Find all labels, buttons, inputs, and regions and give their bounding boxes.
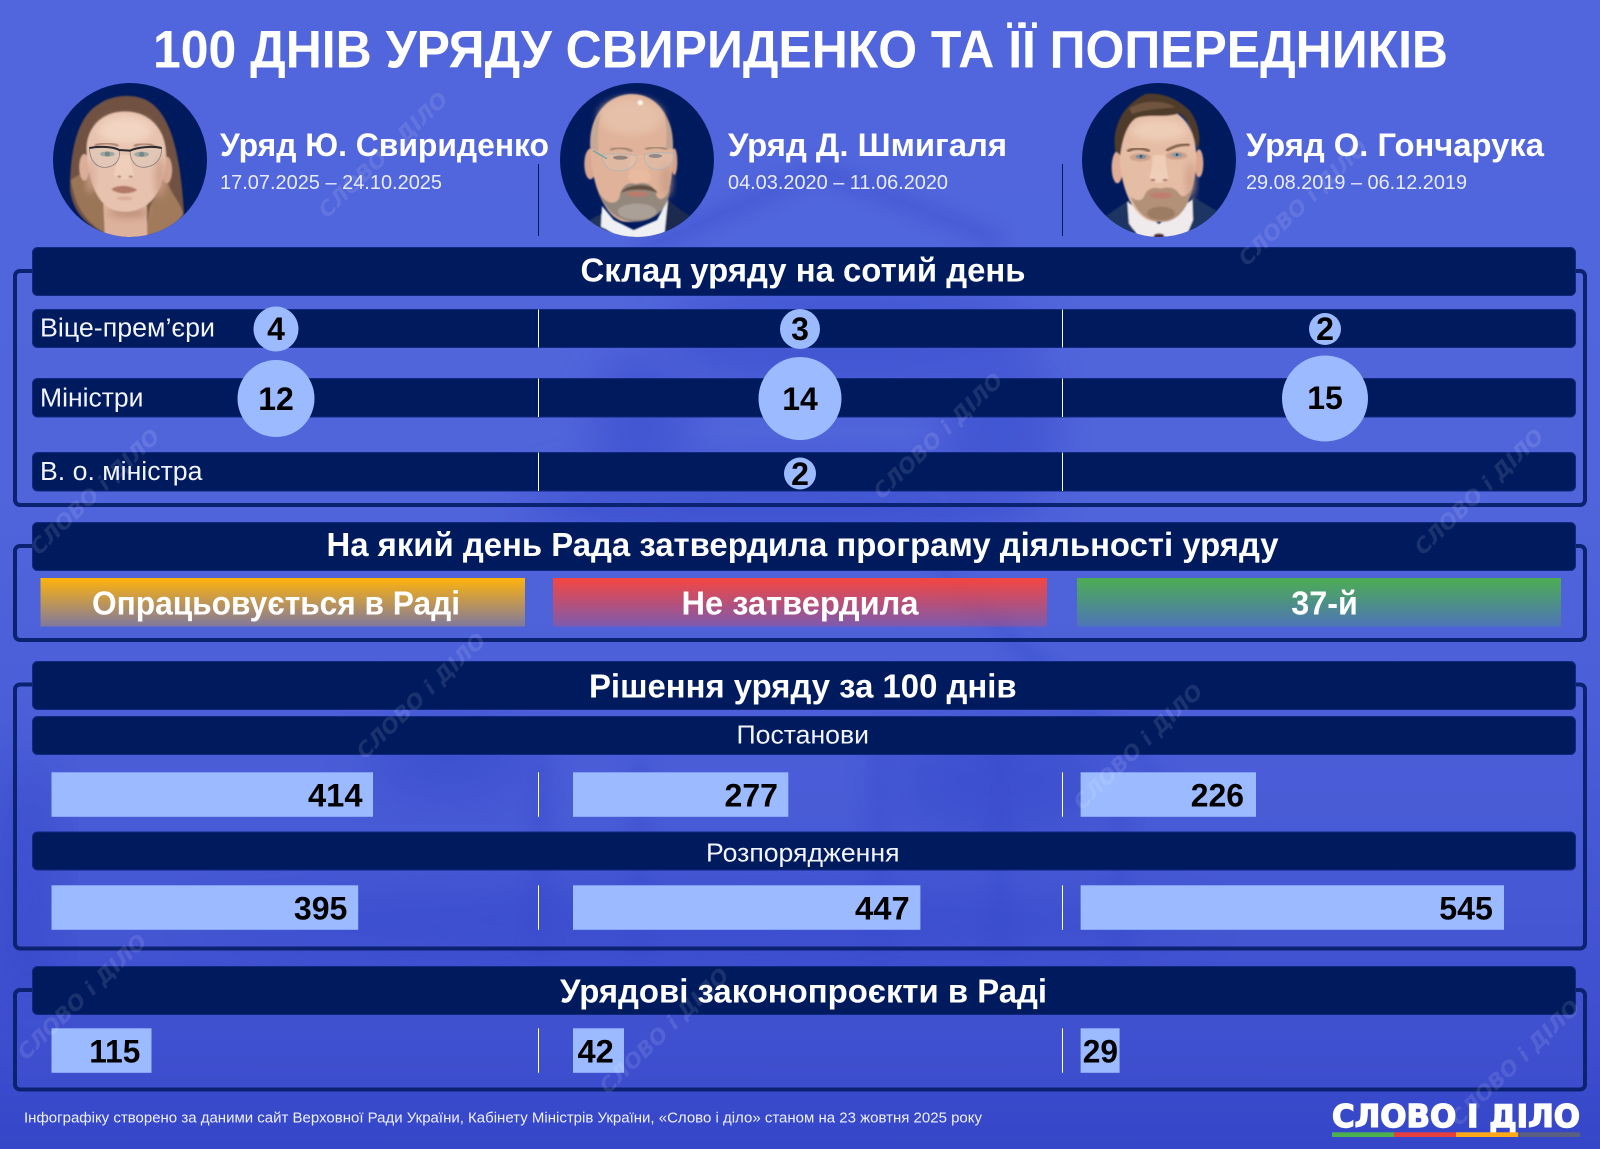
text: СЛОВО і ДІЛО — [1234, 135, 1373, 271]
heading: programme approval: На який день Рада затвердила програму діяльності уряду — [326, 526, 1279, 563]
bar chart: bills — [52, 1028, 1120, 1073]
heading: decisions: Рішення уряду за 100 днів — [589, 668, 1017, 704]
footer source note: Інфографіку створено за даними сайт Верховної Ради України, Кабінету Міністрів України, «Слово і діло» станом на 23 жовтня 2025 року — [24, 1111, 983, 1127]
heading: programme approval — [32, 522, 1576, 570]
bar chart: bills: 29 — [1083, 1034, 1118, 1070]
panel: Svyrydenko government header — [53, 83, 549, 240]
row: deputy prime ministers: 2 — [1316, 311, 1334, 347]
bar chart: resolutions: 414 — [308, 778, 363, 814]
row: ministers: 15 — [1307, 380, 1343, 416]
row: ministers: 14 — [782, 381, 818, 417]
name: Honcharuk: Уряд О. Гончарука — [1246, 127, 1544, 163]
row: ministers — [32, 356, 1576, 442]
title: 100 ДНІВ УРЯДУ СВИРИДЕНКО ТА ЇЇ ПОПЕРЕДНИКІВ — [153, 20, 1448, 80]
panel: government bills in parliament — [15, 966, 1585, 1090]
text: СЛОВО і ДІЛО — [869, 368, 1008, 504]
row: acting ministers: В. о. міністра — [40, 458, 203, 486]
bar chart: orders: 395 — [294, 890, 347, 926]
text: СЛОВО і ДІЛО — [595, 963, 734, 1099]
bar chart: bills: 115 — [89, 1034, 140, 1070]
dates: Shmyhal: 04.03.2020 – 11.06.2020 — [728, 171, 948, 194]
portrait: Oleksii Honcharuk — [1082, 83, 1236, 240]
text: СЛОВО і ДІЛО — [1410, 424, 1549, 560]
row: ministers: 12 — [258, 381, 294, 417]
heading: bills: Урядові законопроєкти в Раді — [560, 972, 1047, 1009]
bar chart: bills: 42 — [578, 1034, 614, 1070]
row: deputy prime ministers: 3 — [791, 311, 809, 347]
row: deputy prime ministers: 4 — [267, 311, 285, 347]
subheading: orders: Розпорядження — [706, 838, 900, 868]
dates: Honcharuk: 29.08.2019 – 06.12.2019 — [1246, 171, 1467, 194]
dates: Svyrydenko: 17.07.2025 – 24.10.2025 — [220, 171, 442, 194]
text: СЛОВО і ДІЛО — [13, 929, 152, 1065]
portrait: Denys Shmyhal — [560, 83, 714, 240]
panel: Honcharuk government header — [1082, 83, 1544, 240]
row: deputy prime ministers: Віце-прем’єри — [40, 314, 215, 342]
status: Honcharuk — [1077, 578, 1561, 626]
bar chart: orders — [52, 885, 1504, 930]
row: ministers: Міністри — [40, 384, 144, 412]
panel: Shmyhal government header — [560, 83, 1007, 240]
bar chart: resolutions — [52, 772, 1256, 817]
bar chart: resolutions: 226 — [1191, 778, 1244, 814]
name: Shmyhal: Уряд Д. Шмигаля — [728, 127, 1007, 163]
status: Shmyhal — [553, 578, 1047, 626]
logo: Slovo i Dilo: СЛОВО І ДІЛО — [1332, 1099, 1580, 1135]
status: Svyrydenko: Опрацьовується в Раді — [92, 584, 460, 622]
heading: decisions — [32, 662, 1576, 710]
panel: programme approval — [15, 522, 1585, 640]
name: Svyrydenko: Уряд Ю. Свириденко — [220, 127, 549, 163]
panel: government decisions in 100 days — [15, 662, 1585, 948]
row: acting ministers — [32, 452, 1576, 492]
subheading: orders — [32, 832, 1576, 870]
portrait: Yulia Svyrydenko — [53, 83, 207, 240]
text: СЛОВО і ДІЛО — [1446, 995, 1585, 1131]
row: deputy prime ministers — [32, 306, 1576, 352]
subheading: resolutions: Постанови — [736, 720, 869, 750]
text: СЛОВО і ДІЛО — [314, 87, 453, 223]
status: Shmyhal: Не затвердила — [682, 584, 919, 622]
bar chart: orders: 447 — [855, 890, 910, 926]
status: Svyrydenko — [40, 578, 525, 626]
text: СЛОВО і ДІЛО — [352, 628, 491, 764]
bar chart: resolutions: 277 — [724, 778, 778, 814]
text: СЛОВО і ДІЛО — [26, 424, 165, 560]
panel: composition on the 100th day — [15, 248, 1585, 505]
bar chart: orders: 545 — [1439, 890, 1493, 926]
heading: bills — [32, 966, 1576, 1014]
row: acting ministers: 2 — [791, 456, 809, 492]
subheading: resolutions — [32, 716, 1576, 754]
text: СЛОВО і ДІЛО — [1069, 679, 1208, 815]
status: Honcharuk: 37-й — [1291, 584, 1358, 622]
heading: composition — [32, 248, 1576, 296]
heading: composition: Склад уряду на сотий день — [580, 252, 1026, 288]
